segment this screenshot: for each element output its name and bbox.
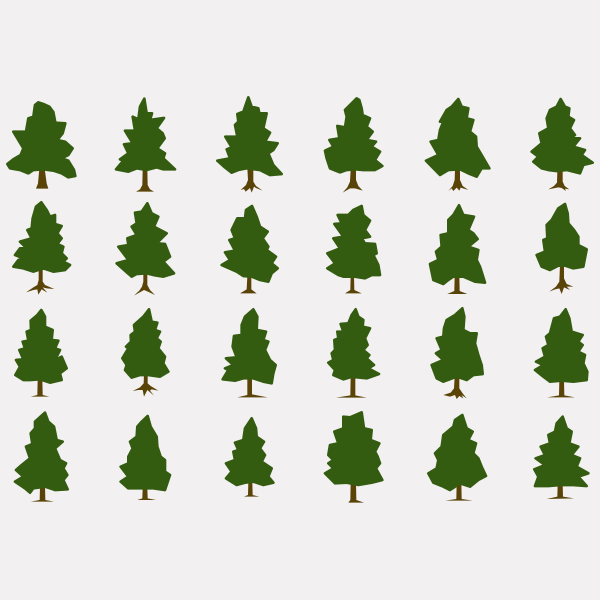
tree r4c4 bbox=[325, 412, 382, 503]
tree r1c5 bbox=[426, 99, 489, 191]
tree r2c5 bbox=[430, 205, 485, 294]
tree r3c1 bbox=[15, 310, 67, 397]
tree r3c4 bbox=[328, 309, 379, 398]
tree r1c3 bbox=[217, 97, 282, 193]
tree r4c3 bbox=[226, 418, 273, 497]
tree r1c4 bbox=[325, 98, 382, 193]
tree r3c3 bbox=[223, 309, 276, 397]
tree r4c2 bbox=[121, 416, 170, 500]
tree r4c6 bbox=[534, 417, 588, 499]
tree r1c1 bbox=[7, 102, 75, 189]
tree r1c6 bbox=[532, 99, 593, 191]
tree r4c1 bbox=[15, 413, 68, 502]
tree r2c1 bbox=[13, 202, 70, 295]
tree r2c2 bbox=[117, 203, 174, 296]
tree r4c5 bbox=[428, 415, 486, 501]
tree r3c6 bbox=[535, 309, 587, 397]
tree r2c4 bbox=[327, 206, 380, 293]
tree r3c2 bbox=[122, 309, 168, 397]
tree r2c3 bbox=[222, 206, 278, 293]
tree r3c5 bbox=[432, 308, 483, 399]
tree r2c6 bbox=[537, 204, 587, 294]
tree r1c2 bbox=[116, 99, 175, 192]
